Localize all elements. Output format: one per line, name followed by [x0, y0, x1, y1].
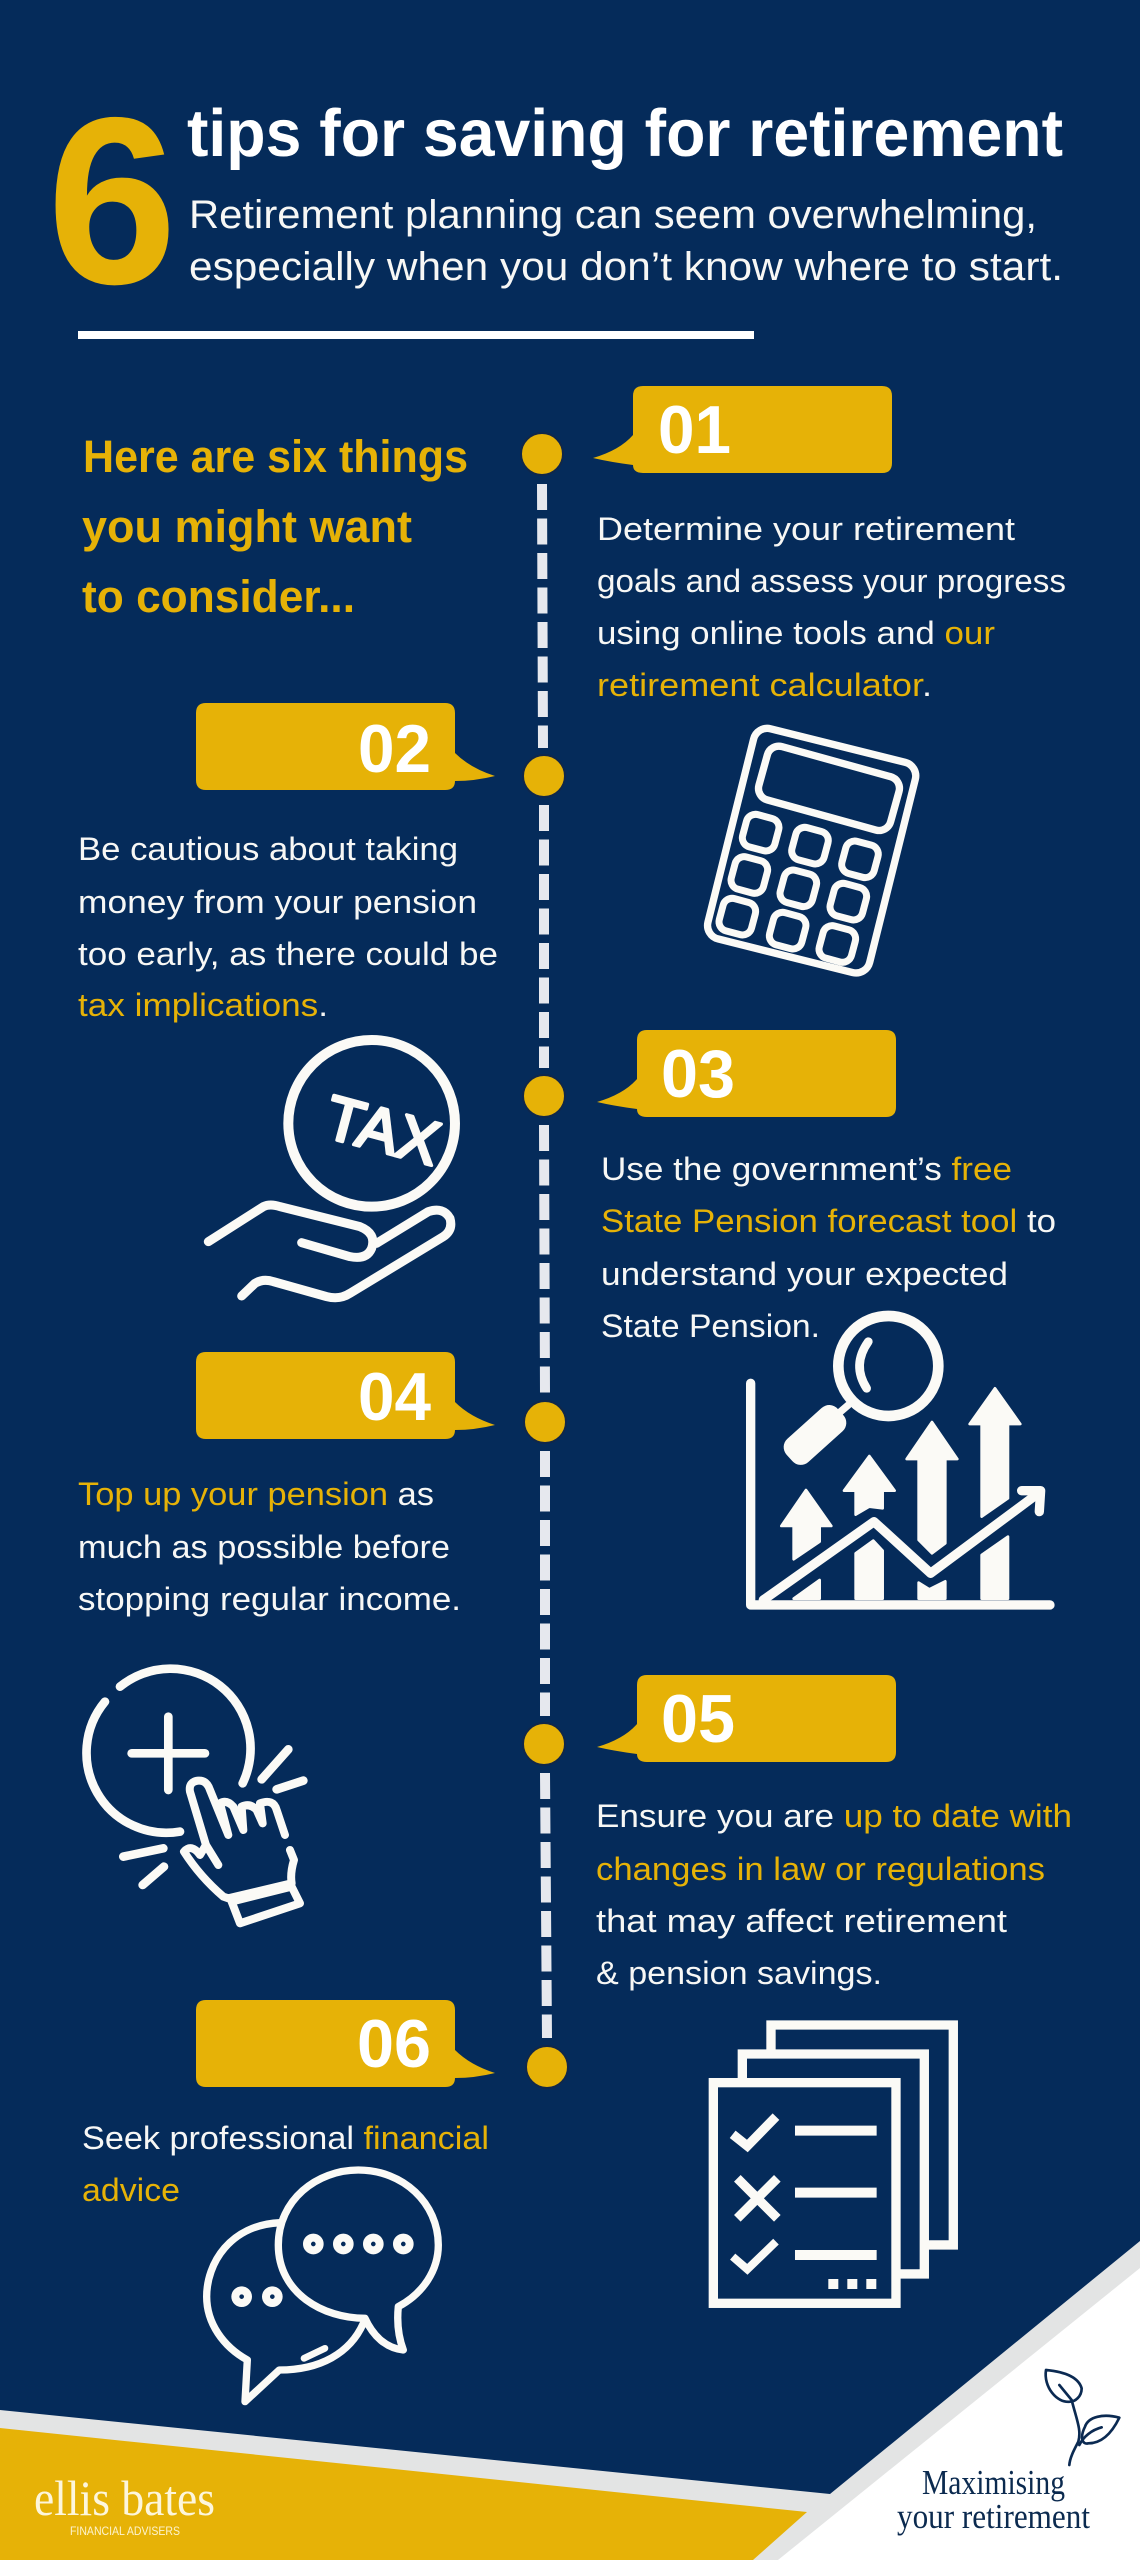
- badge 01: 01: [658, 392, 731, 468]
- text 05: & pension savings.: [596, 1955, 882, 1991]
- yellow footer block: [0, 2428, 807, 2560]
- text 03: [601, 1151, 1056, 1344]
- campaign label: your retirement: [897, 2497, 1090, 2536]
- icon: hand clicking plus: [87, 1669, 303, 1923]
- badge 04: 04: [358, 1359, 431, 1435]
- badge 05: 05: [661, 1681, 735, 1757]
- badge 02: 02: [358, 711, 431, 787]
- text 05: that may affect retirement: [596, 1903, 1007, 1939]
- badge 04: [196, 1352, 495, 1439]
- icon: speech bubbles: [207, 2170, 438, 2402]
- text 01: Determine your retirement: [597, 511, 1015, 547]
- text 03: understand your expected: [601, 1256, 1008, 1292]
- text 05: [596, 1798, 1072, 1991]
- text 03: State Pension forecast tool to: [601, 1203, 1056, 1239]
- badge 01: [593, 386, 892, 473]
- timeline: [521, 433, 568, 2088]
- text 02: [78, 831, 498, 1023]
- text 01: using online tools and our: [597, 615, 995, 651]
- icon: calculator: [705, 725, 919, 976]
- icon: stacked checklist: [713, 2025, 953, 2303]
- text 06: [82, 2120, 489, 2208]
- tip 06: [82, 2000, 495, 2402]
- text 01: goals and assess your progress: [597, 563, 1066, 599]
- text 04: stopping regular income.: [78, 1581, 461, 1617]
- text 06: Seek professional financial: [82, 2120, 489, 2156]
- text 06: advice: [82, 2172, 180, 2208]
- header rule: [78, 331, 754, 339]
- header: [47, 69, 1063, 339]
- icon: seedling: [1046, 2370, 1119, 2465]
- text 04: Top up your pension as: [78, 1476, 434, 1512]
- grey footer band: [0, 2241, 1140, 2560]
- text 01: [597, 511, 1066, 703]
- timeline dashes: [542, 484, 547, 2038]
- badge 03: [597, 1030, 896, 1117]
- logo: ellis bates: ellis bates: [34, 2470, 215, 2526]
- badge 05: [597, 1675, 896, 1762]
- text 03: State Pension.: [601, 1308, 820, 1344]
- text 02: Be cautious about taking: [78, 831, 458, 867]
- tip 01: [593, 386, 1066, 976]
- timeline dots: [521, 433, 568, 2088]
- badge 02: [196, 703, 495, 790]
- text 02: money from your pension: [78, 884, 477, 920]
- campaign label: [897, 2463, 1090, 2536]
- badge 03: 03: [661, 1036, 735, 1112]
- icon: chart with magnifier: [751, 1316, 1050, 1605]
- logo: ellis bates: FINANCIAL ADVISERS: [70, 2524, 180, 2538]
- intro heading: Here are six things: [83, 431, 468, 482]
- text 03: Use the government’s free: [601, 1151, 1012, 1187]
- text 05: changes in law or regulations: [596, 1851, 1045, 1887]
- badge 06: [196, 2000, 495, 2087]
- tip 05: [596, 1675, 1072, 2303]
- footer: [0, 2241, 1140, 2560]
- title: tips for saving for retirement: [187, 96, 1063, 171]
- intro heading: to consider...: [82, 571, 355, 622]
- tip 02: [78, 703, 498, 1298]
- intro heading: you might want: [82, 501, 412, 552]
- text 02: tax implications .: [78, 987, 328, 1023]
- campaign label: Maximising: [922, 2463, 1065, 2502]
- big number 6: 6: [47, 69, 177, 334]
- intro heading: [82, 431, 468, 622]
- tip 03: [597, 1030, 1056, 1605]
- text 01: retirement calculator .: [597, 667, 932, 703]
- icon: tax coin on hand: [208, 1040, 455, 1298]
- text 02: too early, as there could be: [78, 936, 498, 972]
- text 04: [78, 1476, 461, 1617]
- text 04: much as possible before: [78, 1529, 450, 1565]
- subtitle: especially when you don’t know where to start.: [189, 245, 1063, 289]
- text 05: Ensure you are up to date with: [596, 1798, 1072, 1834]
- tip 04: [78, 1352, 495, 1923]
- white corner: [778, 2268, 1140, 2560]
- subtitle: [189, 193, 1063, 289]
- badge 06: 06: [357, 2006, 431, 2082]
- subtitle: Retirement planning can seem overwhelming,: [189, 193, 1037, 237]
- icon: tax coin on hand: TAX: [318, 1083, 447, 1179]
